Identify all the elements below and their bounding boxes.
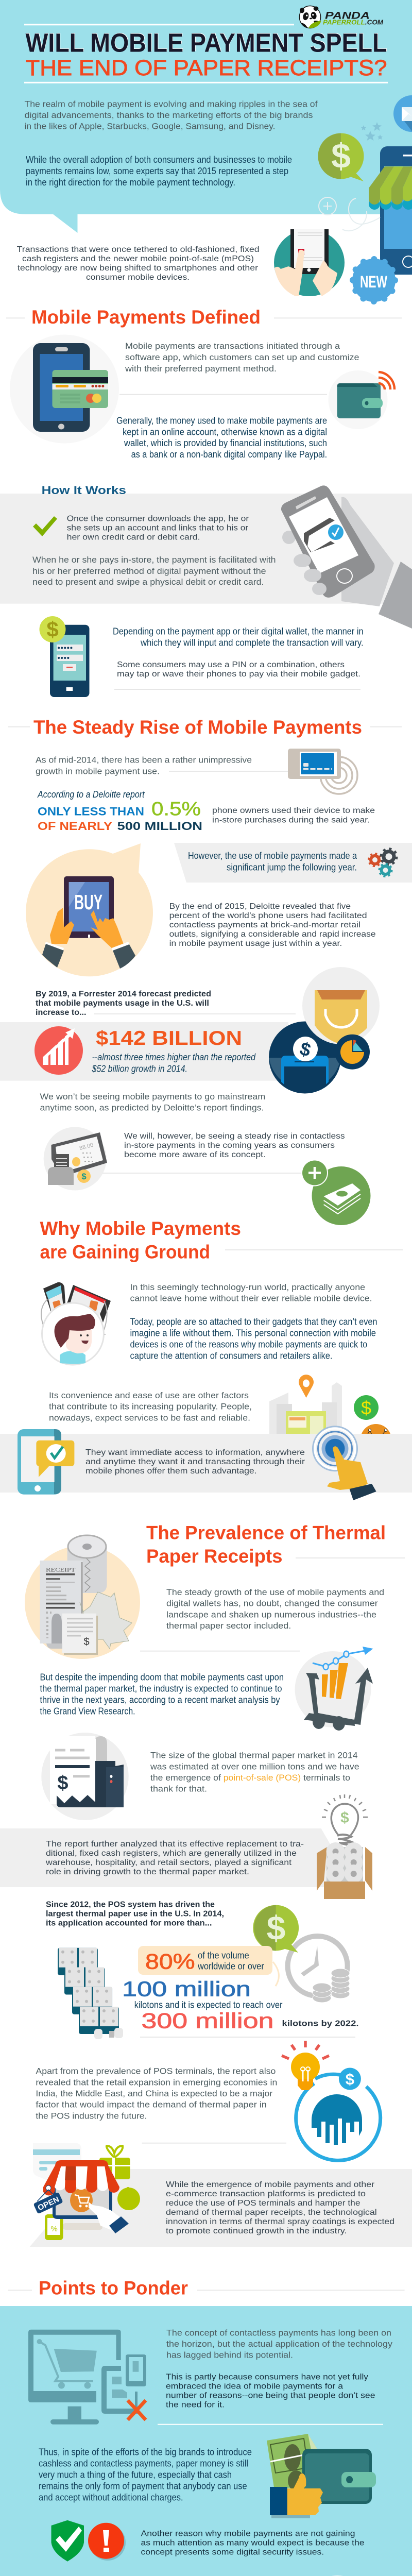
icon: pie chart <box>335 1035 370 1070</box>
text: size of market: The size of the global thermal paper market in 2014 <box>150 1751 357 1760</box>
text: steady growth: landscape and shaken up numerous industries--the <box>166 1609 376 1619</box>
callout: significant jump <box>174 843 412 883</box>
text: not embraced: This is partly because consumers have not yet fully <box>166 2373 368 2382</box>
logo: Panda Paperroll top <box>299 6 384 28</box>
text: digital wallet <box>116 416 327 460</box>
stat: less than 0.5 percent: OF NEARLY <box>38 820 112 833</box>
text: security issues: as much attention as many would expect is because the <box>141 2539 365 2548</box>
text: attached to gadgets: Today, people are so attached to their gadgets that they can’t even <box>130 1317 377 1327</box>
text: steady growth: thermal paper sector included. <box>166 1621 291 1631</box>
panel: intro background <box>0 0 412 214</box>
icon: green dollar bubble 2: $ <box>267 1909 285 1947</box>
text: since 2012: Since 2012, the POS system has driven the <box>46 1900 215 1909</box>
stat: 100 and 300 million <box>122 1977 358 2033</box>
stat: less than 0.5 percent: phone owners used their device to make <box>212 806 375 815</box>
text: mid-2014 <box>36 755 252 776</box>
icon: storefront phone <box>369 146 412 275</box>
panel: report further analyzed <box>0 1828 336 1887</box>
heading: Why Mobile Payments are Gaining Ground: Why Mobile Payments <box>40 1218 241 1239</box>
stat: 100 and 300 million: 300 million <box>141 2009 274 2033</box>
panel: report further analyzed: The report further analyzed that its effective replacement to tra- <box>46 1840 304 1849</box>
text: mobile device <box>130 1282 372 1303</box>
icon: hands on tablet BUY <box>26 843 153 976</box>
heading: The Prevalence of Thermal Paper Receipts: The Prevalence of Thermal <box>146 1522 386 1543</box>
text: convenience: Its convenience and ease of use are other factors <box>49 1391 249 1400</box>
text: paper money: cashless and contactless payments, paper money is still <box>39 2459 248 2469</box>
text: almost three times: --almost three times higher than the reported <box>92 1052 256 1062</box>
text: paper money: and accept without additional charges. <box>39 2492 183 2502</box>
intro text 2: in the right direction for the mobile payment technology. <box>26 177 235 188</box>
icon: hands on tablet BUY: BUY <box>74 890 102 914</box>
heading: Points to Ponder: Points to Ponder <box>39 2277 188 2298</box>
text: retail expansion: the POS industry the future. <box>36 2111 147 2121</box>
text: contactless concept: the horizon, but the actual application of the technology <box>166 2339 393 2349</box>
text: retail expansion: India, the Middle East, and China is expected to be a major <box>36 2089 272 2098</box>
text: paper money: Thus, in spite of the efforts of the big brands to introduce <box>39 2447 252 2458</box>
icon: wallet, cash and thumbs up <box>267 2434 376 2518</box>
stat: 100 and 300 million: kilotons by 2022. <box>282 2019 358 2028</box>
icon: hand holding phone <box>281 485 412 629</box>
text: end of 2015 <box>169 902 376 948</box>
heading: Why Mobile Payments are Gaining Ground <box>40 1218 403 1263</box>
icon: NEW badge: NEW <box>360 273 388 291</box>
text: digital wallet: as a bank or a non-bank digital company like Paypal. <box>131 449 327 460</box>
icon: person with devices <box>41 1282 111 1365</box>
intro text 1: in the likes of Apple, Starbucks, Google, Samsung, and Disney. <box>25 122 275 131</box>
text: mid-2014: As of mid-2014, there has been a rather unimpressive <box>36 755 252 765</box>
icon: monitor tablet phone with X <box>28 2330 146 2425</box>
icon: gears <box>369 849 397 876</box>
intro text 1: digital advancements, thanks to the marketing efforts of the big brands <box>25 110 313 120</box>
icon: NEW badge <box>352 259 396 302</box>
icon: idea bulb over box of rolls <box>317 1794 372 1899</box>
heading: The Prevalence of Thermal Paper Receipts: Paper Receipts <box>146 1546 282 1567</box>
text: size of market: thank for that. <box>150 1784 207 1793</box>
text: in-store: his or her preferred method of digital payment without the <box>32 566 266 576</box>
title <box>24 24 388 83</box>
icon: phone with credit card <box>10 335 119 443</box>
icon: green check <box>33 516 57 536</box>
icon: bulb and coin ring chart: $ <box>346 2070 354 2088</box>
text: set up account: she sets up an account and links that to his or <box>67 524 248 533</box>
heading: Why Mobile Payments are Gaining Ground: are Gaining Ground <box>40 1242 210 1263</box>
stat: less than 0.5 percent: in-store purchases during the said year. <box>212 816 370 825</box>
heading: The Prevalence of Thermal Paper Receipts <box>146 1522 405 1567</box>
text: paper money: very much a thing of the future, especially that cash <box>39 2469 232 2480</box>
stat: less than 0.5 percent: ONLY LESS THAN <box>38 805 144 818</box>
text: steady growth <box>166 1587 384 1631</box>
stat: 100 and 300 million: kilotons and it is expected to reach over <box>134 1999 282 2010</box>
text: e-commerce: While the emergence of mobile payments and other <box>166 2180 374 2189</box>
text: transaction manner <box>113 626 364 648</box>
icon: POS terminal: $ <box>81 1172 87 1181</box>
panel: e-commerce band <box>30 2169 412 2247</box>
text: paper money: remains the only form of payment that anybody can use <box>39 2481 247 2492</box>
logo: Panda Paperroll top: PAPERROLL.COM <box>323 18 384 26</box>
callout: significant jump: However, the use of mobile payments made a <box>188 851 357 861</box>
text: impending doom: But despite the impending doom that mobile payments cast upon <box>40 1672 284 1683</box>
text: PIN or tap: Some consumers may use a PIN or a combination, others <box>117 660 345 669</box>
panel: report further analyzed: role in driving growth to the thermal paper market. <box>46 1868 249 1876</box>
icon: green coin <box>354 1395 379 1420</box>
text: end of 2015: percent of the world’s phone users had facilitated <box>169 911 367 920</box>
panel: 142 billion band <box>0 1022 288 1081</box>
text: definition: Mobile payments are transactions initiated through a <box>125 341 340 351</box>
icon: green dollar bubble 2 <box>253 1905 299 1953</box>
icon: POS terminal <box>44 1127 107 1190</box>
text: digital wallet: Generally, the money used to make mobile payments are <box>116 416 327 426</box>
callout: 80 percent: of the volume <box>198 1951 249 1961</box>
text: PIN or tap: may tap or wave their phones to pay via their mobile gadget. <box>117 670 360 679</box>
text: Forrester forecast: By 2019, a Forrester 2014 forecast predicted <box>36 990 211 998</box>
heading: How It Works: How It Works <box>42 484 126 497</box>
text: paper money <box>39 2447 252 2502</box>
panel: report further analyzed: warehouse, hospitality, and retail sectors, played a significant <box>45 1858 292 1867</box>
icon: receipt printer <box>41 1733 129 1820</box>
text: transaction manner: which they will input and complete the transaction will vary. <box>140 637 364 648</box>
text: definition: with their preferred payment method. <box>125 364 277 374</box>
text: convenience: that contribute to its increasing popularity. People, <box>49 1402 252 1412</box>
icon: tablet with people <box>303 2575 372 2576</box>
icon: pallets of paper rolls <box>58 1948 123 2039</box>
icon: receipts and paper roll: RECEIPT <box>46 1566 76 1573</box>
text: in-store <box>32 555 276 587</box>
icon: phone with PIN and coin <box>39 616 90 697</box>
icon: green dollar bubble: $ <box>331 137 351 176</box>
text: immediate access: and anytime they want it and transacting through their <box>85 1458 305 1466</box>
logo: Panda Paperroll top: PANDA <box>325 10 370 22</box>
text: size of market: was estimated at over one million tons and we have <box>150 1761 359 1771</box>
text: transactions: consumer mobile devices. <box>86 273 190 282</box>
text: impending doom: thrive in the next years, according to a recent market analysis by <box>40 1695 280 1705</box>
text: e-commerce: reduce the use of POS terminals and hamper the <box>166 2199 360 2208</box>
text: not mainstream: We won’t be seeing mobile payments to go mainstream <box>40 1092 265 1101</box>
faint decorative outlines <box>319 197 380 231</box>
title: WILL MOBILE PAYMENT SPELL <box>26 28 387 58</box>
text: immediate access: They want immediate access to information, anywhere <box>85 1448 305 1457</box>
text: transaction manner: Depending on the payment app or their digital wallet, the manner in <box>113 626 364 637</box>
icon: orange chart circle <box>360 1424 391 1455</box>
callout: 80 percent: 80% <box>145 1950 195 1974</box>
icon: receipts and paper roll: $ <box>83 1636 90 1648</box>
text: contactless concept: has lagged behind its potential. <box>166 2350 293 2360</box>
icon: email circle and stars <box>361 95 412 141</box>
icon: phone with check bubble <box>18 1429 74 1495</box>
icon: clock and coins <box>288 1936 350 2003</box>
text: set up account: Once the consumer downloads the app, he or <box>67 515 249 523</box>
text: e-commerce: e-commerce transaction platforms is predicted to <box>166 2190 366 2198</box>
panel: report further analyzed: ditional, fixed cash registers, which are generally utilized in the <box>46 1849 297 1858</box>
icon: receipt printer: $ <box>57 1772 68 1794</box>
intro text 2: While the overall adoption of both consumers and businesses to mobile <box>26 155 292 165</box>
text: security issues <box>141 2530 365 2557</box>
text: retail expansion: Apart from the prevalence of POS terminals, the report also <box>36 2066 276 2076</box>
text: end of 2015: By the end of 2015, Deloitte revealed that five <box>169 902 351 911</box>
text: not embraced <box>166 2373 375 2410</box>
icon: pointing hand on target <box>312 1426 376 1500</box>
icon: phone with PIN and coin: $ <box>46 617 59 641</box>
text: digital wallet: wallet, which is provided by financial institutions, such <box>124 438 327 448</box>
text: steady rise: become more aware of its concept. <box>124 1150 266 1159</box>
text: attached to gadgets: imagine a life without them. This personal connection with mobile <box>130 1328 376 1338</box>
text: not embraced: the need for it. <box>166 2401 225 2410</box>
text: definition: software app, which customers can set up and customize <box>125 352 359 362</box>
text: convenience: nowadays, expect services to be fast and reliable. <box>49 1413 250 1422</box>
text: Forrester forecast: that mobile payments usage in the U.S. will <box>36 999 209 1008</box>
stat: 100 and 300 million: 100 million <box>122 1977 251 2001</box>
text: impending doom: the Grand View Research. <box>40 1706 135 1717</box>
text: end of 2015: in mobile payment usage just within a year. <box>169 939 342 948</box>
text: security issues: concept presents some digital security issues. <box>141 2548 324 2557</box>
text: size of market <box>150 1751 359 1793</box>
text: transactions: Transactions that were once tethered to old-fashioned, fixed <box>17 245 260 254</box>
text: PIN or tap <box>117 660 360 679</box>
text: almost three times <box>92 1052 256 1074</box>
callout: 80 percent <box>138 1946 279 1986</box>
text: almost three times: $52 billion growth in 2014. <box>92 1064 187 1074</box>
icon: city store and pin <box>269 1375 342 1434</box>
text: retail expansion: factor that would impact the demand of thermal paper in <box>36 2100 267 2110</box>
text: retail expansion: revealed that the retail expansion in emerging economies in <box>36 2077 277 2087</box>
text: mid-2014: growth in mobile payment use. <box>36 766 160 776</box>
text: convenience <box>49 1391 252 1422</box>
text: not embraced: number of reasons--one being that people don’t see <box>166 2392 375 2400</box>
text: end of 2015: outlets, signifying a considerable and rapid increase <box>169 930 376 939</box>
icon: online store: OPEN <box>37 2195 61 2212</box>
icon: online store <box>33 2143 140 2240</box>
text: e-commerce: innovation in terms of thermal spray coatings is expected <box>166 2217 394 2226</box>
icon: idea bulb over box of rolls: $ <box>340 1809 349 1826</box>
text: contactless concept <box>166 2328 393 2360</box>
icon: coin ballot circle: $ <box>298 1038 313 1061</box>
text: end of 2015: contactless payments at brick-and-mortar retail <box>169 921 360 929</box>
text: set up account <box>67 515 249 542</box>
stat: less than 0.5 percent: 500 MILLION <box>117 820 202 833</box>
heading: The Steady Rise: The Steady Rise of Mobile Payments <box>33 717 362 738</box>
text: set up account: her own credit card or debit card. <box>67 533 200 542</box>
text: transactions <box>17 245 260 282</box>
text: not mainstream: anytime soon, as predicted by Deloitte’s report findings. <box>40 1103 264 1113</box>
text: impending doom: the thermal paper market, the industry is expected to continue to <box>40 1684 282 1694</box>
text: steady growth: digital wallets has, no doubt, changed the consumer <box>166 1599 378 1608</box>
text: not embraced: embraced the idea of mobile payments for a <box>166 2382 343 2391</box>
speech bubble tail <box>53 214 77 233</box>
text: steady growth: The steady growth of the use of mobile payments and <box>166 1587 384 1597</box>
text: steady rise <box>124 1132 345 1159</box>
text: size of market: the emergence of point-of-sale (POS) terminals to <box>150 1773 350 1783</box>
text: since 2012: its application accounted for more than... <box>46 1919 212 1927</box>
intro text 1: The realm of mobile payment is evolving and making ripples in the sea of <box>25 99 318 109</box>
icon: bulb and coin ring chart <box>282 2041 381 2160</box>
text: mobile device: In this seemingly technology-run world, practically anyone <box>130 1282 365 1292</box>
text: since 2012: largest thermal paper use in the U.S. In 2014, <box>46 1909 224 1918</box>
stat: less than 0.5 percent: 0.5% <box>151 799 201 820</box>
text: immediate access: mobile phones offer them such advantage. <box>85 1467 257 1476</box>
icon: shopping bag <box>302 967 380 1044</box>
text: not mainstream <box>40 1092 265 1113</box>
intro text 2: payments remains low, some experts say that 2015 represented a step <box>26 166 288 176</box>
icon: coin ballot circle <box>269 1021 341 1093</box>
text: digital wallet: kept in an online account, otherwise known as a digital <box>123 427 327 437</box>
panel: immediate access band <box>0 1434 412 1493</box>
text: attached to gadgets <box>130 1317 377 1361</box>
icon: online store: % <box>50 2225 58 2233</box>
icon: shopping cart with growth chart <box>295 1647 373 1731</box>
icon: contactless card <box>288 749 357 794</box>
text: e-commerce: to promote continued growth in the industry. <box>166 2227 347 2235</box>
text: attached to gadgets: devices is one of the reasons why mobile payments are quick to <box>130 1340 367 1350</box>
icon: security shield and alert <box>52 2520 126 2562</box>
callout: significant jump: significant jump the following year. <box>227 862 357 872</box>
icon: contactless wallet <box>329 370 394 429</box>
text: definition <box>125 341 359 374</box>
stat: less than 0.5 percent: According to a Deloitte report <box>37 789 145 800</box>
text: immediate access <box>85 1448 305 1476</box>
panel: how it works <box>0 494 412 604</box>
text: in-store: need to present and swipe a physical debit or credit card. <box>32 577 264 587</box>
text: transactions: cash registers and the newer mobile point-of-sale (mPOS) <box>22 255 254 263</box>
stat: 142 billion: $142 BILLION <box>96 1027 242 1049</box>
title: THE END OF PAPER RECEIPTS? <box>26 56 387 80</box>
text: attached to gadgets: capture the attention of consumers and retailers alike. <box>130 1350 333 1361</box>
icon: receipts and paper roll <box>25 1535 140 1659</box>
text: Forrester forecast <box>36 990 211 1017</box>
icon: hands using tablet <box>274 229 345 296</box>
intro text 1 <box>25 99 318 131</box>
text: e-commerce: demand of thermal paper receipts, the technological <box>166 2208 377 2217</box>
text: impending doom <box>40 1672 284 1717</box>
text: mobile device: cannot leave home without their ever reliable mobile device. <box>130 1294 372 1303</box>
icon: growth chart <box>35 1026 83 1075</box>
heading: Mobile Payments Defined: Mobile Payments Defined <box>31 307 261 328</box>
icon: POS terminal: 88.00 <box>79 1142 94 1151</box>
text: transactions: technology are now being shifted to smartphones and other <box>18 264 258 273</box>
text: contactless concept: The concept of contactless payments has long been on <box>166 2328 391 2337</box>
text: steady rise: We will, however, be seeing a steady rise in contactless <box>124 1132 345 1141</box>
icon: green coin: $ <box>361 1397 371 1418</box>
text: steady rise: in-store payments in the coming years as consumers <box>124 1141 335 1150</box>
panel: points to ponder background <box>0 2306 412 2576</box>
text: e-commerce <box>166 2180 394 2235</box>
text: since 2012 <box>46 1900 224 1927</box>
text: Forrester forecast: increase to... <box>36 1008 87 1017</box>
stat: less than 0.5 percent <box>37 789 375 833</box>
text: retail expansion <box>36 2066 277 2121</box>
intro text 2 <box>26 155 292 188</box>
icon: green dollar bubble <box>318 133 364 181</box>
callout: 80 percent: worldwide or over <box>197 1961 264 1972</box>
icon: money stack <box>301 1159 371 1225</box>
text: security issues: Another reason why mobile payments are not gaining <box>141 2530 355 2538</box>
text: in-store: When he or she pays in-store, the payment is facilitated with <box>32 555 276 565</box>
